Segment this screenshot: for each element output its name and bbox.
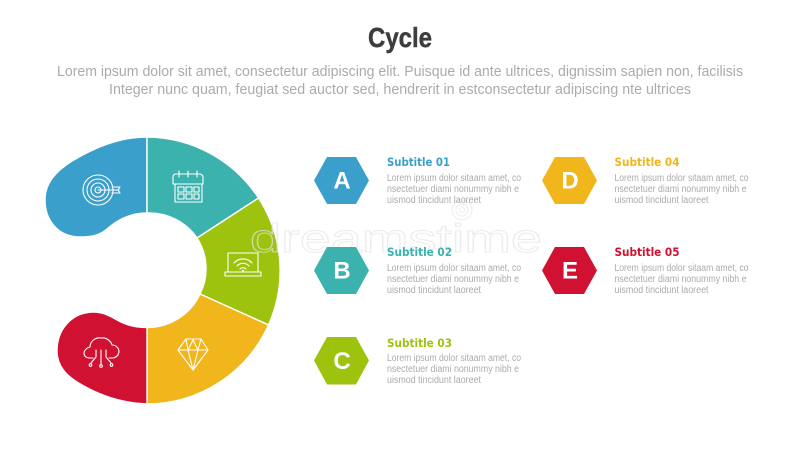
hexagon E bbox=[542, 247, 597, 294]
icon: target bbox=[83, 175, 120, 205]
body 04: Lorem ipsum dolor sitaam amet, co bbox=[614, 173, 749, 184]
segment: blue bbox=[45, 137, 147, 237]
item A bbox=[314, 155, 521, 206]
segment: yellow bbox=[147, 294, 268, 404]
body 03: nsectetuer diami nonummy nibh e bbox=[387, 364, 519, 375]
body 02: uismod tincidunt laoreet bbox=[387, 285, 481, 296]
item B bbox=[314, 245, 521, 296]
subtitle 04: Subtitle 04 bbox=[614, 155, 680, 169]
item B: B bbox=[333, 258, 351, 284]
item C bbox=[314, 336, 521, 386]
body 04: nsectetuer diami nonummy nibh e bbox=[614, 184, 747, 195]
body 05: nsectetuer diami nonummy nibh e bbox=[614, 274, 747, 285]
title: Cycle bbox=[368, 22, 432, 53]
segment: red bbox=[57, 312, 147, 404]
segment: teal bbox=[147, 137, 258, 238]
hexagon B bbox=[314, 247, 369, 294]
body 02: nsectetuer diami nonummy nibh e bbox=[387, 274, 519, 285]
subtitle 03: Subtitle 03 bbox=[387, 336, 452, 350]
intro text: Lorem ipsum dolor sit amet, consectetur adipiscing elit. Puisque id ante ultrices, dignissim sapien non, facilisis bbox=[57, 64, 743, 80]
item C: C bbox=[333, 348, 351, 375]
watermark: dreamstime bbox=[250, 217, 542, 261]
item E: E bbox=[562, 258, 578, 284]
icon: diamond bbox=[178, 339, 208, 370]
segment: green bbox=[197, 198, 280, 325]
item E bbox=[542, 245, 749, 296]
item A: A bbox=[333, 168, 351, 194]
subtitle 01: Subtitle 01 bbox=[387, 155, 450, 169]
item D bbox=[542, 155, 749, 206]
icon: cloud network bbox=[84, 338, 119, 367]
hexagon D bbox=[542, 157, 597, 204]
subtitle 05: Subtitle 05 bbox=[614, 245, 680, 259]
watermark bbox=[250, 200, 542, 261]
subtitle 02: Subtitle 02 bbox=[387, 245, 452, 259]
body 01: uismod tincidunt laoreet bbox=[387, 195, 481, 206]
intro text: Integer nunc quam, feugiat sed auctor sed, hendrerit in estconsectetur adipiscing nte ultrices bbox=[109, 82, 691, 98]
icon: calendar bbox=[173, 171, 203, 202]
intro text bbox=[57, 64, 743, 98]
body 01: nsectetuer diami nonummy nibh e bbox=[387, 184, 519, 195]
body 04: uismod tincidunt laoreet bbox=[614, 195, 709, 206]
body 03: uismod tincidunt laoreet bbox=[387, 375, 481, 386]
hexagon A bbox=[314, 157, 369, 204]
item D: D bbox=[561, 168, 579, 194]
body 03: Lorem ipsum dolor sitaam amet, co bbox=[387, 353, 521, 364]
body 02: Lorem ipsum dolor sitaam amet, co bbox=[387, 263, 521, 274]
cycle diagram bbox=[45, 137, 280, 404]
body 05: Lorem ipsum dolor sitaam amet, co bbox=[614, 263, 749, 274]
body 01: Lorem ipsum dolor sitaam amet, co bbox=[387, 173, 521, 184]
icon: laptop wifi bbox=[225, 253, 261, 276]
body 05: uismod tincidunt laoreet bbox=[614, 285, 709, 296]
hexagon C bbox=[314, 337, 369, 384]
